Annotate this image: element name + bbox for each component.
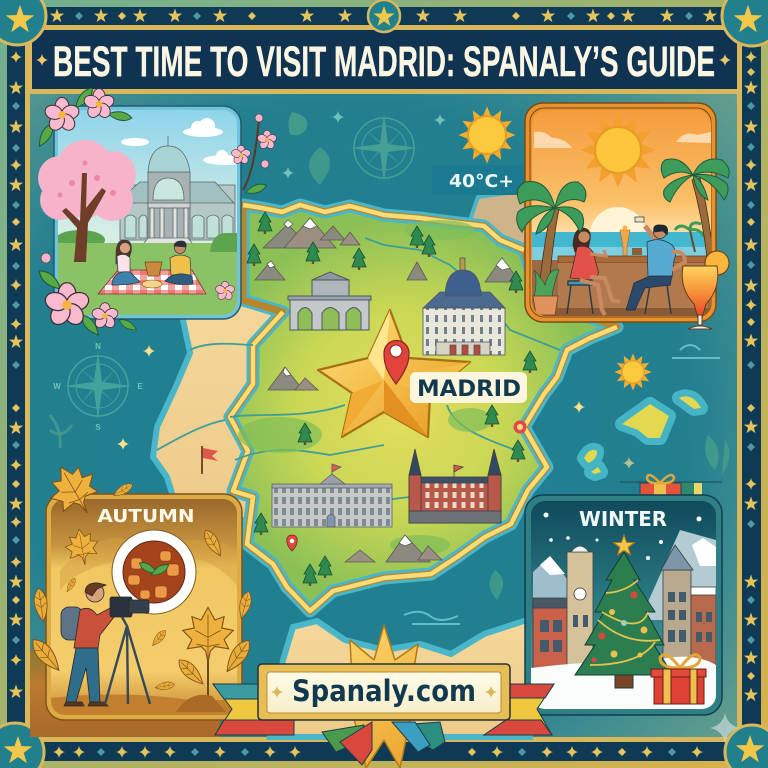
Madrid label: [410, 372, 527, 403]
map pin: south: [287, 535, 297, 551]
christmas tree: [575, 535, 673, 688]
mountains north: [255, 218, 360, 280]
landmark: red brick palace: [409, 449, 501, 523]
corner medallion: top right: [722, 0, 768, 46]
gift box: [651, 655, 706, 704]
landmark: domed building: [423, 258, 505, 355]
cherry tree: [38, 140, 136, 262]
Madrid gold star: [318, 310, 470, 437]
small sun over the sea: [614, 353, 652, 391]
sandy land: North Africa: [270, 619, 530, 737]
panel: spring picnic: [36, 85, 247, 338]
mountains centre and south: [268, 367, 442, 562]
ribbon: right: [392, 684, 554, 752]
landmark: royal palace: [272, 464, 392, 527]
Spain landmass: [230, 205, 617, 611]
compass rose: left with N S E W: S: [95, 423, 101, 432]
panel: autumn: [27, 455, 255, 720]
corner medallion: bottom right: [725, 725, 768, 768]
corner medallion: bottom left: [0, 723, 44, 768]
autumn leaves: [63, 526, 225, 691]
compass rose: top: [350, 114, 418, 182]
decorative sea leaves and sparkles: [50, 111, 729, 624]
autumn heading: AUTUMN: [98, 506, 194, 527]
large foreground leaves: [27, 455, 255, 712]
cherry branch beside spring panel: [230, 114, 278, 196]
pine trees: [247, 212, 537, 586]
palm fronds: [517, 159, 729, 234]
winter heading: WINTER: [579, 507, 667, 531]
compass rose: left with N S E W: N: [95, 342, 101, 351]
map pin: Madrid: [384, 341, 409, 384]
rivers: [157, 238, 560, 500]
mountains north east: [407, 258, 520, 282]
stew plate: [112, 530, 196, 614]
sun icon with temperature: 40°C+: [449, 171, 514, 192]
autumn ground strip: [30, 650, 220, 737]
bottom sparkle: [710, 713, 740, 743]
sun icon with temperature: [432, 106, 528, 195]
top centre medallion: [368, 0, 400, 32]
Madrid label: MADRID: [417, 377, 521, 402]
ribbon: left: [213, 684, 372, 765]
corner medallion: top left: [0, 0, 46, 45]
map pin: east coast: [514, 420, 526, 434]
compass rose: left with N S E W: W: [53, 382, 61, 391]
photographer: [61, 583, 150, 706]
title banner: [26, 26, 738, 94]
green hills on the map: [238, 220, 492, 555]
landmark: Puerta de Alcala: [288, 272, 371, 330]
cherry blossoms: [36, 85, 236, 338]
Balearic islands: [584, 396, 701, 474]
logo plaque: Spanaly.com: [292, 674, 476, 708]
panel: winter: [525, 495, 722, 715]
cocktail glass: [682, 251, 729, 329]
map sea: [30, 93, 737, 737]
logo plaque: [258, 664, 510, 720]
map flag: [202, 446, 218, 474]
gift on winter panel: [620, 475, 722, 501]
Portugal: [153, 300, 283, 520]
compass rose: left with N S E W: [53, 342, 143, 432]
sandy neighbouring land: France: [470, 190, 530, 256]
compass rose: left with N S E W: E: [137, 382, 143, 391]
panel: summer terrace: [517, 103, 729, 329]
banner star: [298, 625, 470, 768]
